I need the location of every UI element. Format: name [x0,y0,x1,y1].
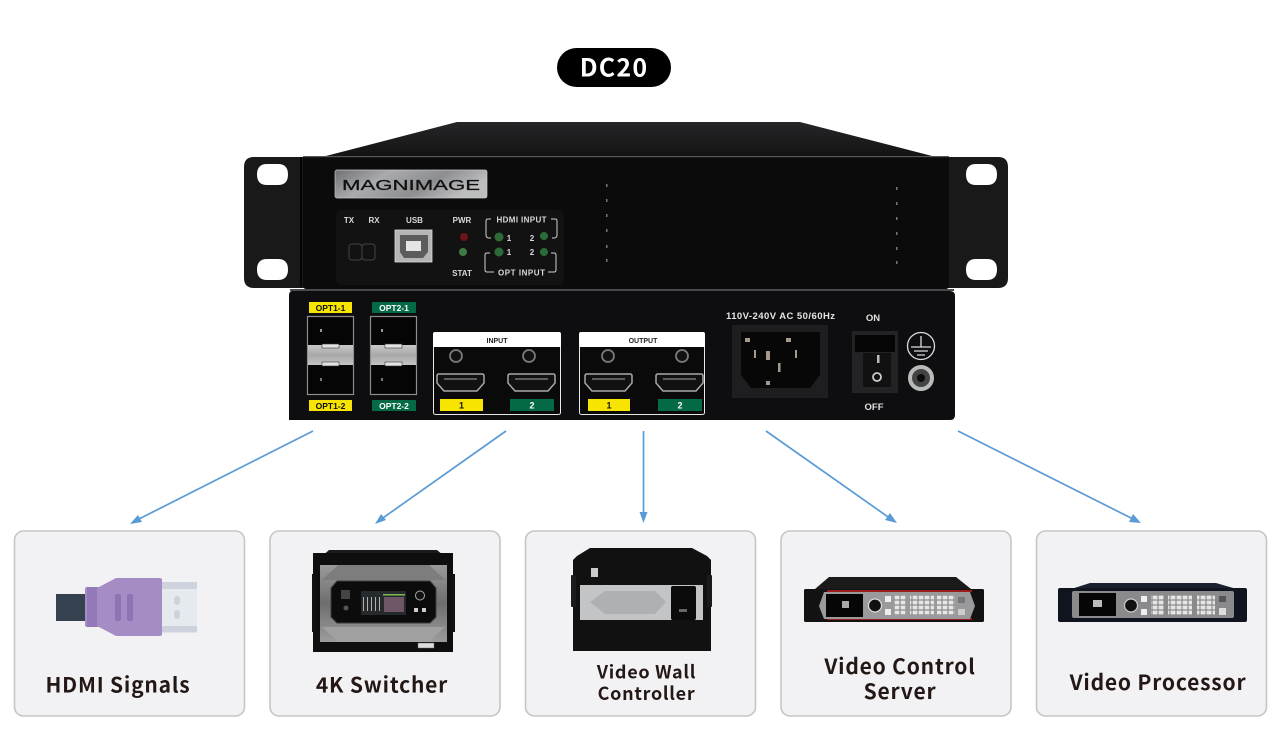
optical port labels: OPT1-1 [316,303,346,313]
ground symbol [908,332,934,360]
ON label: ON [866,313,880,324]
arrow: to Video Wall Controller [640,431,648,523]
printed control panel: OPT INPUT [498,268,545,278]
front view of DC20 device [244,122,1008,289]
printed control panel: TX [344,216,355,225]
right rack ear [945,157,1008,288]
title badge: DC20 [557,48,671,87]
OFF label: OFF [864,402,884,413]
rear view of DC20 device [289,289,955,420]
icon: HDMI plug [56,578,197,636]
printed control panel [336,210,564,285]
optical port labels: OPT2-1 [379,303,409,313]
vent dots [606,184,898,264]
printed control panel: 2 [530,234,535,243]
arrow: to 4K Switcher [375,431,506,524]
input port group: INPUT [486,338,508,345]
output port group: 2 [677,400,683,410]
printed control panel: 1 [507,248,512,257]
rear chassis [289,291,955,420]
printed control panel: RX [368,216,380,225]
label [596,658,696,706]
HDMI and OPT brackets [485,219,557,272]
left rack ear [244,157,308,288]
optical port labels: OPT2-2 [379,401,409,411]
input port group [433,332,561,414]
output port group: OUTPUT [629,338,658,345]
status LEDs [459,232,548,256]
printed control panel: HDMI INPUT [496,216,547,224]
output port group [579,332,705,414]
product image: video wall controller [571,548,712,651]
front panel [303,156,949,289]
card: 4K Switcher [270,531,500,716]
card: Video Control Server [781,531,1011,716]
printed control panel: 2 [530,248,535,257]
rocker switch [852,331,898,393]
printed control panel: 1 [507,234,512,243]
SFP cage 2 [370,316,416,394]
printed control panel: PWR [453,216,472,225]
title badge: DC20: DC20 [580,48,648,84]
card: Video Wall Controller [526,531,756,716]
label: 4K Switcher [316,670,448,700]
label: Video Processor [1069,667,1246,697]
logo plate: MAGNIMAGE: MAGNIMAGE [342,177,480,194]
ground bolt [910,367,932,389]
product image: video processor [1058,583,1247,622]
printed control panel: USB [406,216,423,225]
label: HDMI Signals [45,670,191,700]
optical port labels: OPT1-2 [316,401,346,411]
TX RX fibre port [349,244,375,260]
input port group: 2 [529,400,535,410]
USB port [395,230,432,262]
label: Video Control [823,651,976,681]
card: HDMI Signals [14,531,244,716]
label: Controller [598,680,695,706]
optical port labels [309,302,416,411]
top cover [322,122,936,157]
input port group: 1 [459,400,464,410]
arrow: to Video Control Server [766,431,897,523]
printed control panel: STAT [452,269,472,278]
label: Video Wall [596,658,696,684]
logo plate: MAGNIMAGE [335,170,487,198]
card: Video Processor [1036,531,1266,716]
power socket [732,325,828,398]
voltage label: 110V-240V AC 50/60Hz [726,311,835,322]
label [823,651,976,706]
product image: 4K switcher [312,550,455,652]
product image: video control server [804,577,984,622]
arrow: to Video Processor [958,431,1141,523]
output port group: 1 [606,400,612,410]
SFP cage 1 [308,316,354,394]
label: Server [864,676,936,706]
arrow: to HDMI Signals [130,431,313,524]
